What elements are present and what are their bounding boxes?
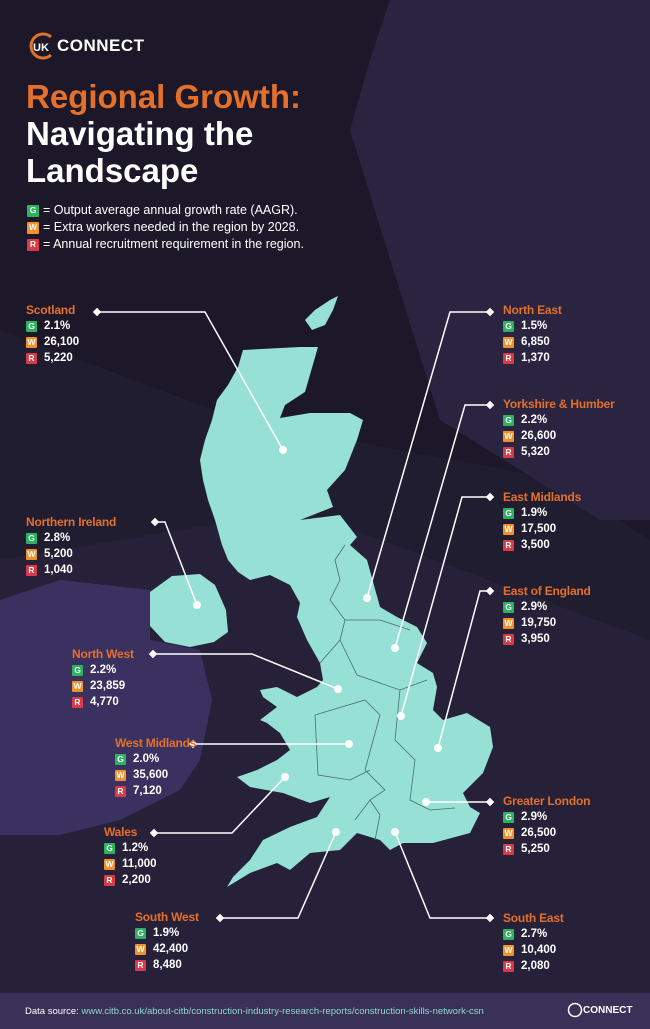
label: Wales: R — [106, 874, 113, 884]
footer logo: CONNECT — [583, 1004, 632, 1016]
label: West Midlands: R — [117, 786, 124, 796]
label: East Midlands: W — [504, 524, 513, 534]
label: North West: 4,770 — [90, 696, 119, 708]
legend: = Annual recruitment requirement in the region. — [43, 237, 304, 251]
label: North West: North West — [72, 647, 134, 661]
label: East Midlands — [503, 490, 581, 551]
label: South East: R — [505, 960, 512, 970]
label: West Midlands: W — [116, 770, 125, 780]
label: West Midlands: 35,600 — [133, 769, 168, 781]
label: North East: 1,370 — [521, 352, 550, 364]
logo: UK — [33, 42, 49, 54]
label: North West: 23,859 — [90, 680, 125, 692]
label: North East: W — [504, 336, 513, 346]
label: Wales — [104, 825, 157, 886]
label: Yorkshire & Humber: 26,600 — [521, 430, 556, 442]
label: Northern Ireland: R — [28, 564, 35, 574]
label: Scotland: W — [27, 336, 36, 346]
map: Shetland/Orkney — [305, 296, 338, 330]
label: Northern Ireland: Northern Ireland — [26, 515, 116, 529]
label: North East: R — [505, 352, 512, 362]
label: Yorkshire & Humber: 5,320 — [521, 446, 550, 458]
label: Wales: G — [106, 842, 113, 852]
label: East of England: W — [504, 618, 513, 628]
label: East Midlands: G — [505, 508, 512, 518]
label: East Midlands: 17,500 — [521, 523, 556, 535]
label: North West: R — [74, 696, 81, 706]
map: Great Britain — [200, 347, 493, 887]
label: East Midlands: East Midlands — [503, 490, 581, 504]
label: Yorkshire & Humber: Yorkshire & Humber — [503, 397, 615, 411]
label: East of England: 19,750 — [521, 617, 556, 629]
label: North West: 2.2% — [90, 664, 116, 676]
label: South West: 1.9% — [153, 927, 179, 939]
label: Wales: Wales — [104, 825, 137, 839]
label: Scotland — [26, 303, 79, 364]
label: East of England: 3,950 — [521, 633, 550, 645]
label: Northern Ireland: W — [27, 548, 36, 558]
footer — [0, 993, 650, 1029]
label: South East: South East — [503, 911, 564, 925]
label: Greater London: 26,500 — [521, 827, 556, 839]
label: East of England — [503, 584, 591, 645]
Ireland — [0, 580, 212, 835]
label: East of England: East of England — [503, 584, 591, 598]
title — [26, 78, 301, 189]
label: North West: G — [74, 664, 81, 674]
footer: www.citb.co.uk/about-citb/construction-industry-research-reports/construction-skills-network-csn — [82, 1006, 484, 1016]
label: West Midlands: West Midlands — [115, 736, 196, 750]
label: South West: W — [136, 944, 145, 954]
label: South East — [503, 911, 564, 972]
title: Landscape — [26, 152, 198, 189]
label: Northern Ireland: G — [28, 532, 35, 542]
label: Scotland: 5,220 — [44, 352, 73, 364]
footer logo — [568, 1002, 632, 1018]
title: Navigating the — [26, 115, 253, 152]
label: Northern Ireland: 1,040 — [44, 564, 73, 576]
label: Greater London: W — [504, 828, 513, 838]
label: South West: 8,480 — [153, 959, 182, 971]
label: Scotland: 2.1% — [44, 320, 70, 332]
label: South West — [135, 910, 199, 971]
label: East of England: 2.9% — [521, 601, 547, 613]
label: Northern Ireland: 2.8% — [44, 532, 70, 544]
label: Scotland: R — [28, 352, 35, 362]
label: Yorkshire & Humber — [503, 397, 615, 458]
label: Yorkshire & Humber: R — [505, 446, 512, 456]
label: East of England: G — [505, 602, 512, 612]
label: South East: 2,080 — [521, 960, 550, 972]
label: Scotland: G — [28, 320, 35, 330]
label: Greater London: Greater London — [503, 794, 590, 808]
label: West Midlands: 2.0% — [133, 753, 159, 765]
label: West Midlands: G — [117, 754, 124, 764]
label: South West: G — [137, 928, 144, 938]
label: South East: 10,400 — [521, 944, 556, 956]
label: Yorkshire & Humber: W — [504, 430, 513, 440]
legend: = Output average annual growth rate (AAGR). — [43, 203, 298, 217]
label: Greater London: 2.9% — [521, 811, 547, 823]
label: Wales: W — [105, 858, 114, 868]
legend: G — [30, 204, 36, 214]
label: South West: South West — [135, 910, 199, 924]
label: Yorkshire & Humber: G — [505, 414, 512, 424]
label: West Midlands — [115, 736, 196, 797]
label: Greater London: G — [505, 812, 512, 822]
label: Northern Ireland — [26, 515, 116, 576]
label: Greater London: R — [505, 844, 512, 854]
logo — [30, 32, 145, 60]
label: North East: 1.5% — [521, 320, 547, 332]
label: Scotland: 26,100 — [44, 336, 79, 348]
data source: Data source: — [25, 1006, 79, 1016]
label: East Midlands: 3,500 — [521, 539, 550, 551]
label: Wales: 11,000 — [122, 858, 157, 870]
label: South East: W — [504, 944, 513, 954]
label: South West: R — [137, 960, 144, 970]
label: East Midlands: R — [505, 540, 512, 550]
label: Yorkshire & Humber: 2.2% — [521, 414, 547, 426]
label: Northern Ireland: 5,200 — [44, 548, 73, 560]
legend: R — [30, 238, 36, 248]
label: Wales: 1.2% — [122, 842, 148, 854]
label: South West: 42,400 — [153, 943, 188, 955]
label: East Midlands: 1.9% — [521, 507, 547, 519]
legend: = Extra workers needed in the region by 2028. — [43, 220, 299, 234]
label: Greater London: 5,250 — [521, 843, 550, 855]
legend: W — [29, 222, 37, 232]
logo: CONNECT — [57, 36, 145, 55]
label: Scotland: Scotland — [26, 303, 75, 317]
label: North West — [72, 647, 134, 708]
legend — [27, 203, 304, 251]
label: North West: W — [73, 680, 82, 690]
label: Wales: 2,200 — [122, 874, 151, 886]
title: Regional Growth: — [26, 78, 301, 115]
label: North East: 6,850 — [521, 336, 550, 348]
label: North East: G — [505, 320, 512, 330]
label: West Midlands: 7,120 — [133, 785, 162, 797]
label: South East: 2.7% — [521, 928, 547, 940]
label: Greater London — [503, 794, 590, 855]
label: North East — [503, 303, 562, 364]
label: South East: G — [505, 928, 512, 938]
label: North East: North East — [503, 303, 562, 317]
map: Northern Ireland — [150, 574, 228, 647]
label: East of England: R — [505, 634, 512, 644]
